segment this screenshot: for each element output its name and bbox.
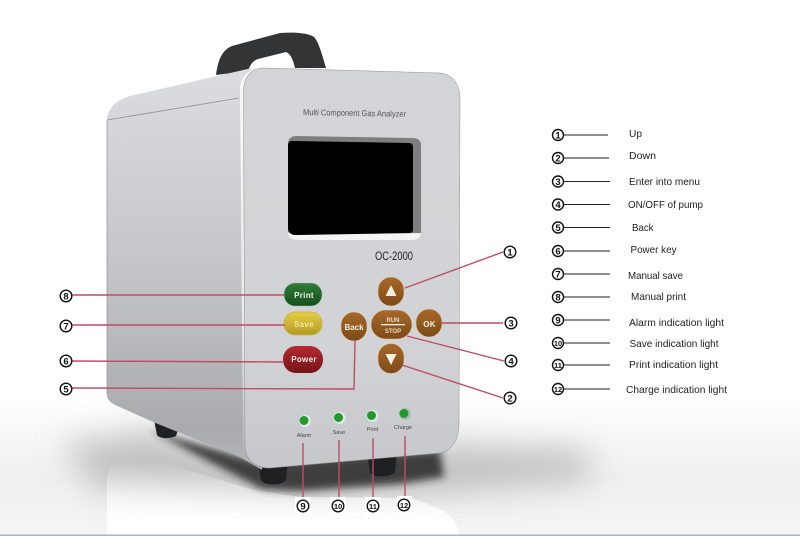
button: up xyxy=(378,277,404,306)
legend 2 xyxy=(552,150,656,164)
badge 12 xyxy=(397,496,412,514)
legend 10 xyxy=(552,338,719,350)
light: charge: Charge xyxy=(394,425,412,431)
legend 9: 9 xyxy=(555,316,561,326)
badge 9 xyxy=(295,497,311,516)
badge 5 xyxy=(60,383,72,396)
badge 6 xyxy=(60,355,72,368)
legend 5 xyxy=(552,222,654,234)
light: print: Print xyxy=(367,427,379,433)
legend 9 xyxy=(552,314,724,329)
handle xyxy=(216,33,326,75)
legend 6 xyxy=(552,244,677,258)
badge 4: 4 xyxy=(508,356,514,368)
legend 1: Up xyxy=(629,128,642,140)
legend 3: Enter into menu xyxy=(629,176,700,188)
legend 10: Save indication light xyxy=(630,338,719,350)
badge 10: 10 xyxy=(334,502,342,511)
legend 7: 7 xyxy=(555,270,561,280)
legend 10: 10 xyxy=(554,339,562,348)
badge 8 xyxy=(60,290,72,302)
button: run stop: STOP xyxy=(385,329,401,335)
legend 8: 8 xyxy=(555,292,561,304)
badge 10 xyxy=(330,497,346,516)
legend 4: ON/OFF of pump xyxy=(628,199,703,211)
badge 3 xyxy=(505,317,517,330)
callout lines xyxy=(72,252,504,497)
legend 2: Down xyxy=(629,150,656,162)
floor shadow xyxy=(60,430,590,505)
legend 6: 6 xyxy=(555,246,561,258)
side edge stroke xyxy=(106,120,108,394)
front panel xyxy=(244,68,460,468)
legend 11 xyxy=(552,359,718,371)
screen bezel xyxy=(288,136,421,240)
button: run stop: RUN xyxy=(386,318,400,324)
badge 11 xyxy=(365,497,381,516)
legend 1: 1 xyxy=(555,130,561,142)
legend 1 xyxy=(552,128,642,142)
legend 12 xyxy=(552,384,727,396)
badge 7: 7 xyxy=(63,322,69,332)
floor reflection xyxy=(107,456,458,536)
badge 2 xyxy=(504,392,516,404)
legend 11: Print indication light xyxy=(629,359,718,371)
shadow under device xyxy=(150,430,444,491)
legend 12: 12 xyxy=(554,385,562,394)
badge 1: 1 xyxy=(507,248,513,258)
legend 8 xyxy=(552,291,686,304)
indicator lights xyxy=(297,408,412,439)
model name: OC-2000 xyxy=(375,251,413,263)
legend 3: 3 xyxy=(555,177,561,188)
bottom edge strip xyxy=(0,534,800,536)
button: back: Back xyxy=(344,323,364,332)
badge 8: 8 xyxy=(63,292,69,302)
side panel xyxy=(107,68,262,470)
button: print: Print xyxy=(294,291,314,300)
device title: Multi Component Gas Analyzer xyxy=(303,107,406,119)
legend 4: 4 xyxy=(555,200,561,211)
badge 4 xyxy=(505,355,517,368)
button: power: Power xyxy=(291,355,317,364)
light: save: Save xyxy=(333,430,345,436)
legend 2: 2 xyxy=(555,154,561,164)
legend 5: 5 xyxy=(555,223,561,234)
legend 6: Power key xyxy=(630,244,677,256)
badge 9: 9 xyxy=(300,502,306,512)
badge 5: 5 xyxy=(63,384,69,396)
light: alarm: Alarm xyxy=(297,433,312,439)
front panel highlight xyxy=(240,68,270,468)
navigation buttons xyxy=(341,277,442,374)
device: analyzer body xyxy=(107,33,460,485)
legend 5: Back xyxy=(632,222,654,234)
badge 1 xyxy=(504,246,516,258)
badge 12: 12 xyxy=(400,501,408,510)
legend 7: Manual save xyxy=(628,270,683,282)
callout number badges xyxy=(60,246,517,516)
badge 11: 11 xyxy=(369,502,377,511)
legend 8: Manual print xyxy=(631,291,686,303)
badge 3: 3 xyxy=(508,318,514,330)
legend 7 xyxy=(552,268,683,282)
button: run stop xyxy=(371,310,412,339)
button: ok: OK xyxy=(423,320,436,329)
legend 11: 11 xyxy=(554,361,562,370)
legend 3 xyxy=(552,176,700,188)
badge 7 xyxy=(60,320,72,332)
badge 6: 6 xyxy=(63,356,69,368)
floor background xyxy=(0,395,800,536)
buttons: print save power xyxy=(283,283,323,373)
button: down xyxy=(378,344,404,374)
legend xyxy=(552,128,727,396)
feet xyxy=(154,420,397,484)
legend 12: Charge indication light xyxy=(626,384,727,396)
legend 9: Alarm indication light xyxy=(629,317,724,329)
legend 4 xyxy=(552,199,703,211)
button: save: Save xyxy=(294,320,314,329)
screen xyxy=(288,141,413,235)
badge 2: 2 xyxy=(507,394,513,404)
side seam xyxy=(107,98,239,120)
